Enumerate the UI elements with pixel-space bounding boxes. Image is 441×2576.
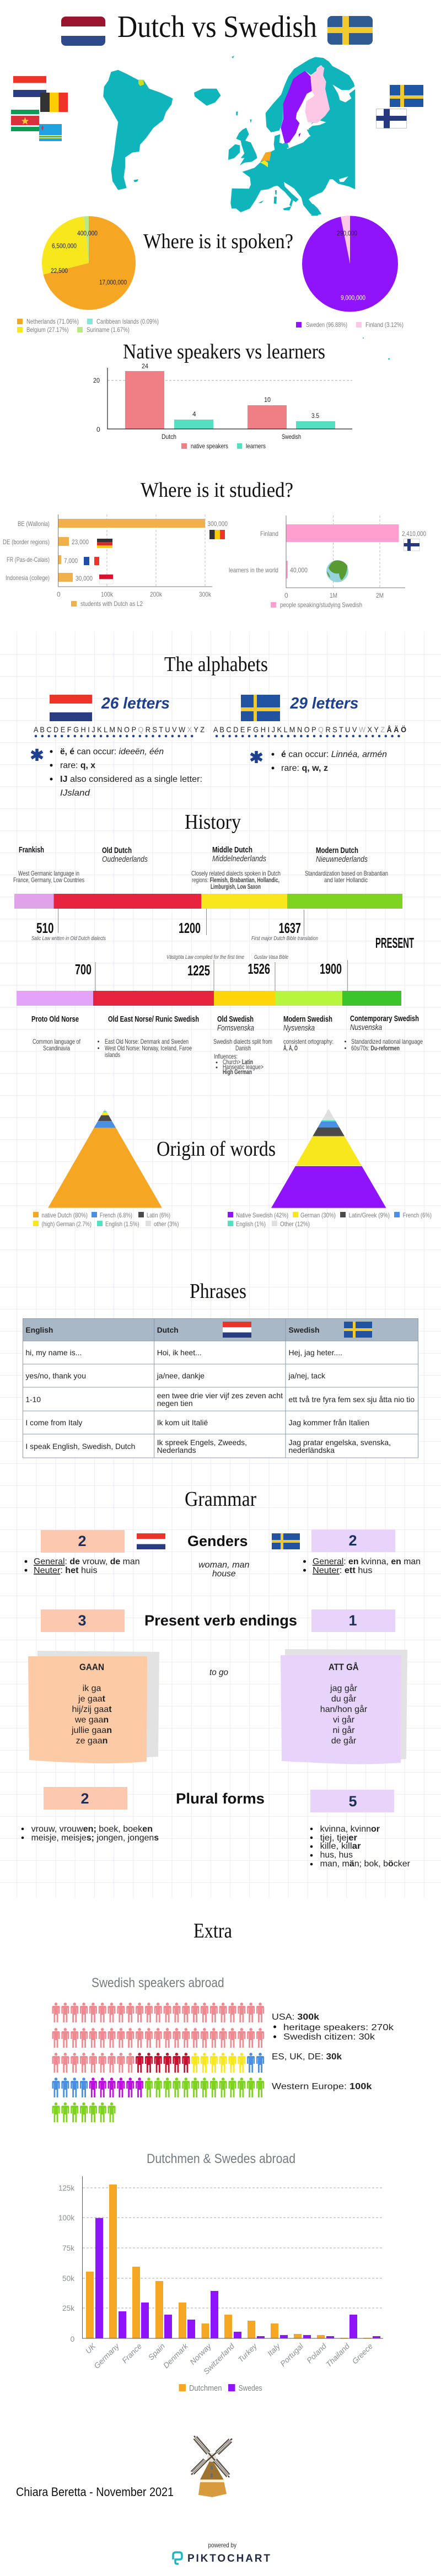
pie chart: Swedish speakers: 290,000 bbox=[337, 229, 357, 237]
bar chart: Dutchmen and Swedes abroad bbox=[58, 2176, 383, 2393]
bar chart: students with Dutch as L2: 0 bbox=[57, 591, 61, 598]
table: phrases: English bbox=[25, 1325, 53, 1334]
panel: genders bbox=[24, 1530, 421, 1579]
table: phrases: een twee drie vier vijf zes zeven acht bbox=[157, 1391, 283, 1400]
table: phrases: 1-10 bbox=[25, 1395, 41, 1404]
period: Proto Old Norse bbox=[31, 1015, 80, 1052]
panel: genders: Neuter: het huis bbox=[34, 1566, 97, 1575]
powered by Piktochart bbox=[173, 2541, 270, 2564]
table: phrases: yes/no, thank you bbox=[25, 1371, 86, 1380]
period: Middle Dutch: Middelnederlands bbox=[212, 854, 266, 863]
period: Old Dutch: Old Dutch bbox=[102, 846, 132, 855]
bar chart: Dutchmen and Swedes abroad: Switzerland bbox=[202, 2341, 236, 2376]
note: ATT GÅ conjugation: han/hon går bbox=[320, 1704, 368, 1714]
timeline: Dutch bbox=[13, 845, 402, 942]
panel: Dutch alphabet bbox=[31, 695, 205, 798]
timeline: Dutch: 1200 bbox=[179, 920, 201, 936]
icon: Piktochart logo bbox=[173, 2552, 182, 2564]
icon: Suriname flag bbox=[11, 110, 39, 131]
pie chart: Dutch speakers bbox=[42, 216, 136, 310]
bar chart: students with Dutch as L2: DE (border regions) bbox=[3, 538, 50, 546]
panel: genders: General: de vrouw, de man bbox=[34, 1557, 140, 1566]
label: to go: to go bbox=[209, 1668, 228, 1677]
heading: where is it studied: Where is it studied? bbox=[141, 479, 293, 502]
period: Modern Dutch: and later Hollandic bbox=[324, 876, 368, 884]
period: Old Dutch bbox=[102, 846, 148, 864]
bar chart: Dutchmen and Swedes abroad: 75k bbox=[62, 2244, 75, 2252]
heading: the alphabets: The alphabets bbox=[164, 653, 268, 676]
flags of Dutch-speaking countries bbox=[11, 76, 68, 141]
text block: speaker counts: ES, UK, DE: 30k bbox=[272, 2052, 342, 2062]
legend: Swedish word origins bbox=[228, 1211, 432, 1228]
period: Proto Old Norse: Proto Old Norse bbox=[31, 1015, 79, 1024]
table: phrases: Dutch bbox=[157, 1325, 179, 1334]
legend: Dutchmen and Swedes bbox=[179, 2384, 262, 2393]
period: Proto Old Norse: Common language of bbox=[33, 1038, 80, 1045]
icon: Dutch flag bbox=[61, 17, 105, 46]
period: Old Swedish: Fornsvenska bbox=[217, 1023, 254, 1033]
pyramid chart: Dutch bbox=[44, 1109, 165, 1208]
panel: plural forms: meisje, meisjes; jongen, jongens bbox=[31, 1833, 159, 1843]
heading: origin of words: Origin of words bbox=[157, 1137, 276, 1161]
period: Old East Norse: islands bbox=[105, 1051, 120, 1059]
bar chart: native speakers vs learners: Dutch bbox=[162, 433, 176, 441]
bar chart: Dutchmen and Swedes abroad: 100k bbox=[58, 2213, 75, 2222]
icon: Netherlands flag bbox=[13, 76, 46, 97]
powered by Piktochart: powered by bbox=[208, 2541, 236, 2549]
panel: genders: Neuter: ett hus bbox=[313, 1566, 373, 1575]
bar chart: native speakers vs learners: native speakers bbox=[191, 442, 228, 450]
period: Middle Dutch: Closely related dialects spoken in Dutch bbox=[191, 870, 281, 877]
bar chart: Dutchmen and Swedes abroad: Denmark bbox=[162, 2341, 190, 2370]
icon: Dutch flag bbox=[50, 695, 92, 721]
note: GAAN conjugation: je gaat bbox=[78, 1694, 106, 1704]
text block: Dutch alphabet notes: IJ also considered as a single letter: bbox=[60, 775, 202, 784]
bar chart: Dutchmen and Swedes abroad: 25k bbox=[62, 2304, 75, 2312]
legend: Swedish speakers bbox=[296, 321, 404, 329]
period: Modern Swedish: Å, Ä, Ö bbox=[283, 1044, 298, 1052]
heading: extra: Extra bbox=[193, 1919, 232, 1942]
legend: Swedish word origins: French (6%) bbox=[403, 1211, 432, 1219]
icon: asterisk bbox=[31, 749, 42, 761]
bar chart: people speaking or studying Swedish: 2M bbox=[376, 592, 384, 599]
icon: Swedish flag bbox=[241, 695, 280, 721]
note: GAAN conjugation: GAAN bbox=[79, 1662, 104, 1672]
legend: Dutch word origins: other (3%) bbox=[154, 1220, 179, 1228]
powered by Piktochart: PIKTOCHART bbox=[187, 2553, 270, 2564]
period: Contemporary Swedish: 60s/70s: Du-reformen bbox=[351, 1044, 400, 1052]
bar chart: Dutchmen and Swedes abroad: Turkey bbox=[236, 2341, 259, 2364]
panel: Dutch alphabet: A B C D E F G H I J K L M N O P Q R S T U V W X Y Z bbox=[34, 725, 205, 734]
panel: plural forms: man, män; bok, böcker bbox=[320, 1859, 411, 1869]
period: Middle Dutch: Middle Dutch bbox=[212, 845, 252, 855]
pie chart: Dutch speakers: 400,000 bbox=[77, 229, 98, 237]
table: phrases: ja/nee, dankje bbox=[157, 1371, 205, 1380]
timeline: Dutch: First major Dutch Bible translation bbox=[251, 936, 318, 942]
region: Finland bbox=[305, 65, 330, 123]
bar chart: students with Dutch as L2: FR (Pas-de-Calais) bbox=[7, 556, 50, 564]
legend: Dutch word origins: (high) German (2.7%) bbox=[42, 1220, 92, 1228]
panel: plural forms: tjej, tjejer bbox=[320, 1833, 357, 1843]
note: ATT GÅ conjugation: du går bbox=[331, 1694, 357, 1704]
map of South America and Iceland bbox=[103, 70, 221, 190]
bar chart: native speakers vs learners: 4 bbox=[192, 410, 196, 418]
icon: Indonesia flag bbox=[99, 575, 113, 584]
heading: where is it spoken: Where is it spoken? bbox=[143, 230, 293, 253]
legend: Dutch speakers bbox=[17, 318, 159, 334]
bar chart: students with Dutch as L2: BE (Wallonia) bbox=[18, 520, 50, 528]
timeline: Swedish bbox=[17, 954, 423, 1076]
bar chart: people speaking or studying Swedish: learners in the world bbox=[229, 566, 278, 574]
period: Modern Dutch: Nieuwnederlands bbox=[316, 855, 368, 864]
period: Modern Swedish bbox=[283, 1015, 334, 1052]
table: phrases: nederländska bbox=[289, 1446, 335, 1455]
region: Suriname bbox=[138, 80, 144, 86]
legend: Dutch word origins: French (6.8%) bbox=[100, 1211, 132, 1219]
panel: genders: General: en kvinna, en man bbox=[313, 1557, 421, 1566]
timeline bar: Dutch bbox=[14, 894, 402, 909]
text block: speaker counts: USA: 300k bbox=[272, 2012, 319, 2022]
bar chart: Dutchmen and Swedes abroad: Norway bbox=[188, 2341, 213, 2366]
icon: Dutch flag bbox=[223, 1322, 251, 1338]
bar chart: Dutchmen and Swedes abroad: Thailand bbox=[324, 2341, 352, 2369]
icon: Finland flag bbox=[376, 109, 407, 128]
bar chart: native speakers vs learners: 3.5 bbox=[311, 412, 319, 420]
panel: present verb endings: Present verb endings bbox=[144, 1612, 297, 1629]
bar chart: Dutchmen and Swedes abroad: UK bbox=[84, 2341, 98, 2355]
panel: Swedish alphabet: 29 letters bbox=[290, 695, 358, 712]
legend: Dutch word origins: native Dutch (80%) bbox=[42, 1211, 88, 1219]
panel: genders: house bbox=[212, 1569, 236, 1579]
flags of Swedish-speaking countries bbox=[376, 85, 423, 128]
timeline: Swedish: 1225 bbox=[187, 962, 210, 979]
legend: Dutch speakers: Netherlands (71.06%) bbox=[26, 318, 79, 325]
icon: asterisk bbox=[251, 751, 262, 763]
period: Old East Norse: East Old Norse: Denmark and Sweden bbox=[105, 1038, 189, 1045]
map of Europe bbox=[228, 56, 355, 216]
icon: Sweden flag bbox=[390, 85, 423, 107]
bar chart: people speaking or studying Swedish: 2,410,000 bbox=[402, 530, 426, 538]
table: phrases: Hoi, ik heet... bbox=[157, 1348, 202, 1357]
period: Modern Dutch bbox=[305, 846, 388, 884]
icon: globe bbox=[326, 560, 348, 582]
timeline: Swedish: 1900 bbox=[320, 960, 342, 977]
panel: present verb endings: 1 bbox=[348, 1612, 357, 1629]
bar chart: native speakers vs learners: 24 bbox=[142, 362, 148, 370]
bar chart: students with Dutch as L2: 300k bbox=[199, 591, 212, 598]
note: GAAN conjugation: ze gaan bbox=[76, 1736, 107, 1746]
bar chart: people speaking or studying Swedish: 1M bbox=[330, 592, 337, 599]
legend: Swedish speakers: Sweden (96.88%) bbox=[306, 321, 347, 329]
period: Old Swedish: Influences: bbox=[214, 1053, 238, 1060]
bar chart: native speakers vs learners: 10 bbox=[264, 396, 271, 404]
heading: history: History bbox=[185, 811, 241, 834]
table: phrases: I come from Italy bbox=[25, 1418, 82, 1427]
timeline bar: Swedish bbox=[17, 991, 401, 1006]
text block: speaker counts: heritage speakers: 270k bbox=[283, 2023, 394, 2032]
panel: present verb endings: 3 bbox=[78, 1612, 87, 1629]
period: Frankish: West Germanic language in bbox=[18, 870, 79, 877]
text block: speaker counts: Western Europe: 100k bbox=[272, 2082, 372, 2091]
period: Old Swedish: Church> Latin bbox=[223, 1058, 253, 1066]
table: phrases: Nederlands bbox=[157, 1446, 196, 1455]
icon: Finland flag bbox=[404, 539, 420, 551]
period: Old East Norse: West Old Norse: Norway, Iceland, Faroe bbox=[105, 1044, 192, 1052]
table: phrases: Ik kom uit Italië bbox=[157, 1418, 208, 1427]
legend: Dutch word origins: English (1.5%) bbox=[105, 1220, 139, 1228]
table: phrases: ja/nej, tack bbox=[288, 1371, 326, 1380]
pie chart: Dutch speakers: 22,500 bbox=[51, 267, 68, 275]
period: Modern Dutch: Standardization based on Brabantian bbox=[305, 870, 388, 877]
bar chart: Dutchmen and Swedes abroad: Italy bbox=[266, 2341, 282, 2358]
heading: phrases: Phrases bbox=[190, 1280, 246, 1303]
bar chart: Dutchmen and Swedes abroad: Germany bbox=[92, 2341, 121, 2370]
table: phrases: Jag kommer från Italien bbox=[289, 1418, 369, 1427]
bar chart: people speaking or studying Swedish: 40,000 bbox=[290, 566, 308, 574]
panel: present verb endings bbox=[28, 1609, 407, 1764]
bar chart: native speakers vs learners: 0 bbox=[96, 426, 100, 433]
legend: Swedish word origins: Native Swedish (42%) bbox=[236, 1211, 288, 1219]
period: Middle Dutch bbox=[191, 845, 281, 890]
period: Modern Swedish: consistent ortography: bbox=[283, 1038, 334, 1045]
timeline: Dutch: 1637 bbox=[279, 920, 301, 936]
note: ATT GÅ conjugation: ATT GÅ bbox=[329, 1662, 358, 1672]
bar chart: people speaking or studying Swedish: 0 bbox=[284, 592, 288, 599]
text block: speaker counts: Swedish citizen: 30k bbox=[283, 2032, 375, 2042]
icon: Aruba flag bbox=[39, 124, 62, 141]
text block: Swedish alphabet notes bbox=[271, 750, 387, 773]
table: phrases: I speak English, Swedish, Dutch bbox=[25, 1442, 135, 1451]
pyramid chart: Swedish bbox=[267, 1109, 389, 1208]
legend: Dutch speakers: Belgium (27.17%) bbox=[26, 326, 68, 334]
bar chart: students with Dutch as L2: 23,000 bbox=[72, 538, 89, 546]
icon: Swedish flag bbox=[272, 1533, 300, 1549]
timeline: Swedish: Gustav Vasa Bible bbox=[254, 954, 288, 960]
note: ATT GÅ conjugation: de går bbox=[331, 1736, 357, 1746]
bar chart: students with Dutch as L2: 7,000 bbox=[64, 557, 78, 565]
heading: Dutch vs Swedish: Dutch vs Swedish bbox=[117, 10, 317, 44]
legend: Dutch speakers: Caribbean Islands (0.09%) bbox=[96, 318, 159, 325]
pie chart: Dutch speakers: 6,500,000 bbox=[52, 242, 77, 250]
heading: grammar: Grammar bbox=[185, 1488, 256, 1511]
legend: Dutch speakers: Suriname (1.67%) bbox=[87, 326, 130, 334]
period: Contemporary Swedish: Nusvenska bbox=[350, 1023, 382, 1032]
region: Netherlands bbox=[261, 152, 271, 161]
region: Sweden bbox=[281, 71, 312, 143]
period: Contemporary Swedish: Contemporary Swedish bbox=[350, 1014, 419, 1023]
bar chart: Dutchmen and Swedes abroad: 125k bbox=[58, 2183, 75, 2192]
panel: Swedish alphabet: A B C D E F G H I J K L M N O P Q R S T U V W X Y Z Å Ä Ö bbox=[213, 725, 406, 734]
panel: plural forms: vrouw, vrouwen; boek, boeken bbox=[31, 1824, 153, 1834]
bar chart: students with Dutch as L2 bbox=[3, 514, 228, 608]
legend: Swedish word origins: Latin/Greek (9%) bbox=[349, 1211, 390, 1219]
period: Contemporary Swedish bbox=[345, 1014, 423, 1052]
bar chart: Dutchmen and Swedes abroad: 0 bbox=[71, 2334, 75, 2343]
bar chart: students with Dutch as L2: 300,000 bbox=[207, 520, 228, 528]
text block: Dutch alphabet notes: rare: q, x bbox=[60, 761, 95, 770]
period: Old Swedish: Old Swedish bbox=[217, 1015, 254, 1024]
note: GAAN conjugation: we gaan bbox=[74, 1715, 109, 1725]
note: GAAN conjugation bbox=[28, 1651, 159, 1763]
timeline: Swedish: 1526 bbox=[248, 960, 270, 977]
panel: Dutch alphabet: 26 letters bbox=[101, 695, 170, 712]
table: phrases: Swedish bbox=[289, 1325, 320, 1334]
panel: plural forms: 5 bbox=[348, 1793, 357, 1810]
icon: Dutch flag bbox=[137, 1533, 165, 1549]
period: Old Dutch: Oudnederlands bbox=[102, 855, 148, 864]
icon: Germany flag bbox=[97, 539, 112, 548]
period: Modern Swedish: Nysvenska bbox=[283, 1023, 315, 1033]
bar chart: native speakers vs learners: 20 bbox=[93, 377, 100, 384]
bar chart: students with Dutch as L2: Indonesia (college) bbox=[6, 574, 50, 582]
panel: plural forms bbox=[21, 1787, 411, 1869]
icon: Belgium flag bbox=[40, 93, 68, 112]
title bbox=[61, 15, 373, 46]
period: Frankish: France, Germany, Low Countries bbox=[13, 876, 84, 884]
period: Proto Old Norse: Scandinavia bbox=[43, 1044, 70, 1052]
period: Frankish: Frankish bbox=[19, 845, 44, 855]
bar chart: students with Dutch as L2: 100k bbox=[101, 591, 114, 598]
heading: native speakers vs learners: Native speakers vs learners bbox=[123, 340, 325, 363]
region: Belgium bbox=[260, 160, 268, 167]
legend: Dutch word origins bbox=[33, 1211, 179, 1228]
islands bbox=[363, 337, 390, 359]
bar chart: students with Dutch as L2: 30,000 bbox=[76, 575, 93, 582]
legend: Dutchmen and Swedes: Swedes bbox=[239, 2384, 262, 2393]
period: Frankish bbox=[13, 845, 84, 884]
legend: Swedish word origins: Other (12%) bbox=[280, 1220, 310, 1228]
note: ATT GÅ conjugation bbox=[281, 1649, 407, 1764]
panel: genders: 2 bbox=[348, 1532, 357, 1549]
bar chart: Dutchmen and Swedes abroad: 50k bbox=[62, 2274, 75, 2283]
period: Old Swedish: Hanseatic league> bbox=[223, 1063, 263, 1071]
chart title: Dutchmen and Swedes abroad: Dutchmen & Swedes abroad bbox=[147, 2151, 295, 2166]
table: phrases: hi, my name is... bbox=[25, 1348, 82, 1357]
legend: Swedish word origins: English (1%) bbox=[236, 1220, 266, 1228]
icon: windmill bbox=[191, 2436, 232, 2497]
panel: plural forms: 2 bbox=[80, 1790, 89, 1807]
period: Middle Dutch: regions: Flemish, Brabantian, Hollandic, bbox=[192, 876, 279, 884]
legend: Dutchmen and Swedes: Dutchmen bbox=[189, 2384, 222, 2393]
icon: France flag bbox=[84, 557, 99, 565]
bar chart: native speakers vs learners: learners bbox=[246, 442, 266, 450]
bar chart: people speaking or studying Swedish: people speaking/studying Swedish bbox=[280, 601, 362, 609]
icon: Belgium flag bbox=[209, 530, 225, 539]
bar chart: Dutchmen and Swedes abroad: Spain bbox=[146, 2342, 166, 2362]
bar chart: people speaking or studying Swedish bbox=[229, 516, 426, 609]
bar chart: Dutchmen and Swedes abroad: France bbox=[120, 2342, 143, 2365]
period: Old East Norse: Old East Norse/ Runic Swedish bbox=[108, 1015, 199, 1024]
timeline: Dutch: 510 bbox=[36, 920, 54, 936]
panel: genders: Genders bbox=[187, 1533, 248, 1549]
period: Old Swedish: Swedish dialects split from bbox=[213, 1038, 272, 1045]
period: Old Swedish bbox=[213, 1015, 272, 1076]
timeline: Swedish: 700 bbox=[75, 961, 92, 978]
bar chart: native speakers vs learners bbox=[93, 362, 352, 450]
period: Modern Dutch: Modern Dutch bbox=[316, 846, 358, 855]
pictogram chart: Swedish speakers abroad bbox=[52, 2003, 264, 2122]
icon: Swedish flag bbox=[344, 1322, 372, 1338]
bar chart: students with Dutch as L2: students with Dutch as L2 bbox=[80, 600, 143, 608]
note: ATT GÅ conjugation: ni går bbox=[332, 1725, 355, 1735]
period: Middle Dutch: Limburgish, Low Saxon bbox=[211, 883, 261, 890]
panel: plural forms: hus, hus bbox=[320, 1850, 353, 1860]
table: phrases: Hej, jag heter.... bbox=[289, 1348, 342, 1357]
text block: speaker counts bbox=[272, 2012, 394, 2091]
period: Old East Norse bbox=[98, 1015, 199, 1059]
panel: Swedish alphabet bbox=[213, 695, 406, 773]
panel: genders: 2 bbox=[78, 1533, 87, 1549]
panel: plural forms: Plural forms bbox=[176, 1790, 265, 1807]
bar chart: students with Dutch as L2: 200k bbox=[150, 591, 163, 598]
text block: Dutch alphabet notes: IJsland bbox=[60, 788, 90, 798]
pie chart: Swedish speakers: 9,000,000 bbox=[341, 294, 365, 302]
note: ATT GÅ conjugation: vi går bbox=[333, 1715, 355, 1725]
pie chart: Swedish speakers bbox=[302, 216, 398, 312]
text block: Dutch alphabet notes: ë, é can occur: ideeën, één bbox=[60, 747, 164, 756]
icon: Swedish flag bbox=[327, 16, 373, 45]
chart title: Swedish speakers abroad: Swedish speakers abroad bbox=[92, 1976, 224, 1990]
legend: Dutch word origins: Latin (6%) bbox=[147, 1211, 170, 1219]
credit: Chiara Beretta - November 2021 bbox=[16, 2485, 174, 2499]
bar chart: native speakers vs learners: Swedish bbox=[282, 433, 301, 441]
note: ATT GÅ conjugation: jag går bbox=[330, 1683, 358, 1693]
panel: plural forms: kvinna, kvinnor bbox=[320, 1824, 380, 1834]
note: GAAN conjugation: jullie gaan bbox=[71, 1726, 112, 1735]
note: GAAN conjugation: ik ga bbox=[83, 1684, 101, 1693]
pie chart: Dutch speakers: 17,000,000 bbox=[99, 278, 127, 286]
panel: genders: woman, man bbox=[198, 1560, 250, 1570]
table: phrases: Ik spreek Engels, Zweeds, bbox=[157, 1438, 247, 1447]
legend: Swedish speakers: Finland (3.12%) bbox=[365, 321, 404, 329]
bar chart: people speaking or studying Swedish: Finland bbox=[260, 530, 278, 538]
legend: Swedish word origins: German (30%) bbox=[300, 1211, 336, 1219]
text block: Swedish alphabet notes: é can occur: Linnéa, armén bbox=[281, 750, 387, 759]
period: Old Swedish: High German bbox=[223, 1068, 252, 1076]
table: phrases: ett två tre fyra fem sex sju åtta nio tio bbox=[289, 1395, 415, 1404]
bar chart: Dutchmen and Swedes abroad: Poland bbox=[305, 2341, 329, 2365]
table: phrases: negen tien bbox=[157, 1399, 193, 1408]
text block: Dutch alphabet notes bbox=[50, 747, 202, 798]
panel: plural forms: kille, killar bbox=[320, 1842, 361, 1851]
bar chart: Dutchmen and Swedes abroad: Portugal bbox=[278, 2341, 305, 2368]
table: phrases: Jag pratar engelska, svenska, bbox=[289, 1438, 391, 1447]
timeline: Dutch: Salic Law written in Old Dutch dialects bbox=[31, 936, 106, 942]
timeline: Swedish: Västgöta Law compiled for the first time bbox=[166, 954, 244, 960]
period: Modern Swedish: Modern Swedish bbox=[283, 1015, 332, 1024]
table: phrases bbox=[23, 1318, 418, 1458]
period: Old Swedish: Danish bbox=[235, 1044, 251, 1052]
bar chart: Dutchmen and Swedes abroad: Greece bbox=[350, 2342, 374, 2366]
text block: Swedish alphabet notes: rare: q, w, z bbox=[281, 764, 328, 773]
note: GAAN conjugation: hij/zij gaat bbox=[72, 1705, 112, 1714]
